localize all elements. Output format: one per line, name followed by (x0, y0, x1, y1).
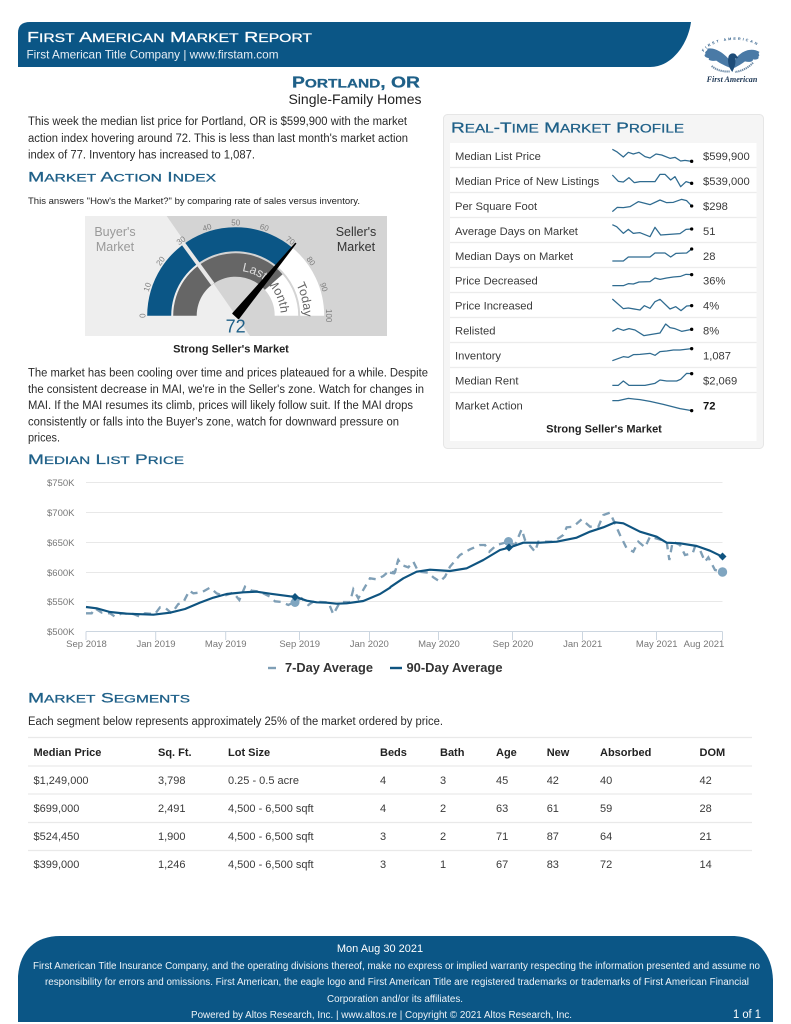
table row 2: 2 (440, 803, 446, 815)
gauge today remainder (277, 248, 324, 316)
chart legend: 7-Day Average (285, 660, 373, 675)
chart legend: 90-Day Average (406, 660, 502, 675)
row labels: Average Days on Market (455, 226, 579, 238)
table header: Age (496, 747, 517, 759)
gauge scale labels: 0 (138, 313, 147, 318)
sparklines: lower rows (612, 273, 693, 412)
row values: 1,087 (703, 350, 731, 362)
table header: DOM (700, 747, 725, 759)
table row 1: 3 (440, 775, 446, 787)
x axis labels: Aug 2021 (684, 639, 724, 650)
table row 1: 45 (496, 775, 508, 787)
table row 4: 72 (600, 859, 612, 871)
line chart: median list price (47, 478, 727, 650)
table row 2: 59 (600, 803, 612, 815)
gauge scale labels: 60 (259, 222, 270, 233)
commentary text block: prices. (28, 432, 60, 444)
gauge last month band (173, 253, 283, 316)
table row 2: $699,000 (34, 803, 79, 815)
commentary text block: consistently or falls into the Buyer's zone, watch for downward pressure on (28, 416, 399, 428)
market action gauge (85, 216, 387, 336)
city heading: PORTLAND , OR (292, 74, 420, 92)
x axis labels: May 2021 (636, 639, 678, 650)
footer disclaimer: First American Title Insurance Company, and the operating divisions thereof, make no express or implied warranty respecting the information presented and assume no (33, 961, 760, 972)
x axis labels: Sep 2019 (279, 639, 320, 650)
row labels: Per Square Foot (455, 201, 538, 213)
table row 1: 42 (700, 775, 712, 787)
x axis labels: May 2019 (205, 639, 247, 650)
eagle right wing (734, 50, 760, 68)
table row 1: $1,249,000 (34, 775, 89, 787)
x axis labels: May 2020 (418, 639, 460, 650)
heading: market action index: M ARKET A CTION I NDEX (28, 170, 216, 184)
gauge scale labels: 40 (201, 222, 213, 233)
row values: 8% (703, 326, 719, 338)
table row 4: $399,000 (34, 859, 79, 871)
x axis labels: Sep 2020 (493, 639, 533, 650)
table row 3: 4,500 - 6,500 sqft (228, 831, 314, 843)
gauge scale labels (138, 218, 333, 323)
table row 3: 1,900 (158, 831, 186, 843)
buyer's market label: Market (96, 240, 135, 254)
table row 3: 64 (600, 831, 612, 843)
x axis labels (66, 639, 724, 650)
x axis labels: Jan 2021 (563, 639, 602, 650)
gauge label: last month: Last Month (243, 262, 290, 312)
panel heading: REAL -T IME M ARKET P ROFILE (451, 120, 684, 136)
footer credit: Powered by Altos Research, Inc. | www.altos.re | Copyright © 2021 Altos Research, Inc. (191, 1010, 572, 1021)
table row 3: $524,450 (34, 831, 79, 843)
row values: $539,000 (703, 176, 750, 188)
gauge scale labels: 80 (304, 255, 317, 268)
footer disclaimer: Corporation and/or its affiliates. (327, 994, 463, 1005)
panel: real-time market profile (444, 114, 764, 448)
gauge scale labels: 10 (142, 281, 153, 293)
table row 4: 3 (380, 859, 386, 871)
report subtitle: First American Title Company | www.firstam.com (26, 48, 278, 62)
table header: Median Price (34, 747, 101, 759)
row labels (455, 151, 600, 412)
row labels: Median Rent (455, 376, 519, 388)
property type: Single-Family Homes (288, 91, 422, 107)
seller's market label: Market (337, 240, 376, 254)
commentary text block: MAI. If the MAI resumes its climb, prices will likely follow suit. If the MAI drops (28, 400, 413, 412)
table row 2: 61 (547, 803, 559, 815)
logo ring text: FIRST AMERICAN (702, 37, 758, 52)
table row 1: 40 (600, 775, 612, 787)
gauge scale labels: 20 (154, 254, 167, 267)
market action explanation: This answers "How's the Market?" by comparing rate of sales versus inventory. (28, 196, 360, 207)
row values: $599,900 (703, 151, 750, 163)
row labels: Median Days on Market (455, 251, 574, 263)
y axis labels (47, 478, 75, 638)
table row 2: 28 (700, 803, 712, 815)
gauge scale labels: 30 (175, 234, 188, 247)
segments explanation: Each segment below represents approximately 25% of the market ordered by price. (28, 716, 443, 728)
row labels: Relisted (455, 326, 495, 338)
table row 4: 1,246 (158, 859, 186, 871)
x axis labels: Jan 2020 (350, 639, 389, 650)
data markers (290, 537, 727, 607)
intro text block: action index hovering around 72. This is less than last month's market action (28, 133, 408, 145)
table row 3: 71 (496, 831, 508, 843)
heading: market segments: M ARKET S EGMENTS (28, 690, 190, 706)
table row 1: 42 (547, 775, 559, 787)
commentary text block: the consistent decrease in MAI, we're in the Seller's zone. Watch for changes in (28, 384, 424, 396)
gauge last month remainder (265, 274, 298, 316)
row labels: Price Decreased (455, 276, 538, 288)
footer disclaimer: responsibility for errors and omissions. First American, the eagle logo and First American Title are registered trademarks or trademarks of First American Financial (45, 977, 749, 988)
intro text block: index of 77. Inventory has increased to 1,087. (28, 150, 255, 162)
table header: New (547, 747, 570, 759)
table row 4: 67 (496, 859, 508, 871)
gauge label: today: Today (298, 281, 312, 316)
eagle body (728, 53, 738, 72)
table header: Beds (380, 747, 407, 759)
row values: 51 (703, 226, 715, 238)
y axis labels: $500K (47, 627, 75, 638)
table row 1: 3,798 (158, 775, 186, 787)
commentary text block: The market has been cooling over time and prices plateaued for a while. Despite (28, 368, 428, 380)
table row 1: 0.25 - 0.5 acre (228, 775, 299, 787)
logo wordmark: First American (707, 75, 758, 84)
x axis labels: Jan 2019 (136, 639, 176, 650)
table row 1 (34, 775, 712, 787)
row labels: Price Increased (455, 300, 533, 312)
eagle left wing (705, 48, 731, 68)
commentary text block (28, 368, 428, 444)
table row 3 (34, 831, 712, 843)
intro text block (28, 116, 408, 162)
chart legend (268, 660, 502, 675)
row labels: Median Price of New Listings (455, 176, 600, 188)
row values: 4% (703, 300, 719, 312)
table row 3: 21 (700, 831, 712, 843)
table row 4: 4,500 - 6,500 sqft (228, 859, 314, 871)
y axis labels: $600K (47, 568, 75, 579)
laurel branches (712, 63, 753, 72)
header banner (18, 22, 691, 67)
y axis labels: $700K (47, 508, 75, 519)
table row 1: 4 (380, 775, 386, 787)
y axis labels: $650K (47, 538, 75, 549)
table row 2 (34, 803, 712, 815)
gauge scale labels: 90 (318, 281, 330, 293)
table row 3: 3 (380, 831, 386, 843)
row values: $2,069 (703, 376, 737, 388)
y axis labels: $550K (47, 597, 75, 608)
table row 3: 2 (440, 831, 446, 843)
table row 2: 4 (380, 803, 386, 815)
table row 4: 83 (547, 859, 559, 871)
row values: $298 (703, 201, 728, 213)
table row 2: 63 (496, 803, 508, 815)
seller's market label: Seller's (336, 225, 376, 239)
table row 2: 2,491 (158, 803, 186, 815)
row values: 72 (703, 400, 715, 412)
90-day average line (86, 522, 722, 615)
table header: Bath (440, 747, 465, 759)
gauge value: 72 (226, 316, 246, 336)
gauge needle (233, 244, 296, 318)
table header: Absorbed (600, 747, 651, 759)
gauge caption: Strong Seller's Market (173, 344, 289, 356)
gauge scale labels: 70 (284, 234, 297, 247)
y axis labels: $750K (47, 478, 75, 489)
sparklines: upper rows (612, 149, 693, 261)
intro text block: This week the median list price for Portland, OR is $599,900 with the market (28, 116, 408, 128)
heading: median list price: M EDIAN L IST P RICE (28, 452, 184, 467)
table row 4: 14 (700, 859, 712, 871)
row values: 36% (703, 276, 725, 288)
report title: FIRST A MERICAN M ARKET R EPORT (27, 29, 313, 46)
footer date: Mon Aug 30 2021 (337, 943, 423, 955)
row labels: Market Action (455, 400, 523, 412)
row labels: Inventory (455, 350, 501, 362)
table header: Sq. Ft. (158, 747, 192, 759)
row values (703, 151, 750, 412)
table row 4 (34, 859, 712, 871)
footer disclaimer (33, 961, 760, 1005)
table row 2: 4,500 - 6,500 sqft (228, 803, 314, 815)
icon: First American eagle logo (702, 37, 760, 84)
buyer's market label: Buyer's (94, 225, 136, 239)
table row 3: 87 (547, 831, 559, 843)
table: market segments (28, 738, 752, 871)
7-day average line (86, 513, 722, 617)
footer (18, 936, 773, 1022)
table header: Lot Size (228, 747, 270, 759)
panel caption: Strong Seller's Market (546, 424, 662, 436)
gauge scale labels: 50 (231, 218, 241, 227)
row labels: Median List Price (455, 151, 541, 163)
page number: 1 of 1 (733, 1009, 761, 1021)
row values: 28 (703, 251, 715, 263)
gauge blue band (147, 227, 292, 316)
table row 4: 1 (440, 859, 446, 871)
table header (34, 747, 725, 759)
gauge scale labels: 100 (324, 309, 333, 323)
x axis labels: Sep 2018 (66, 639, 107, 650)
